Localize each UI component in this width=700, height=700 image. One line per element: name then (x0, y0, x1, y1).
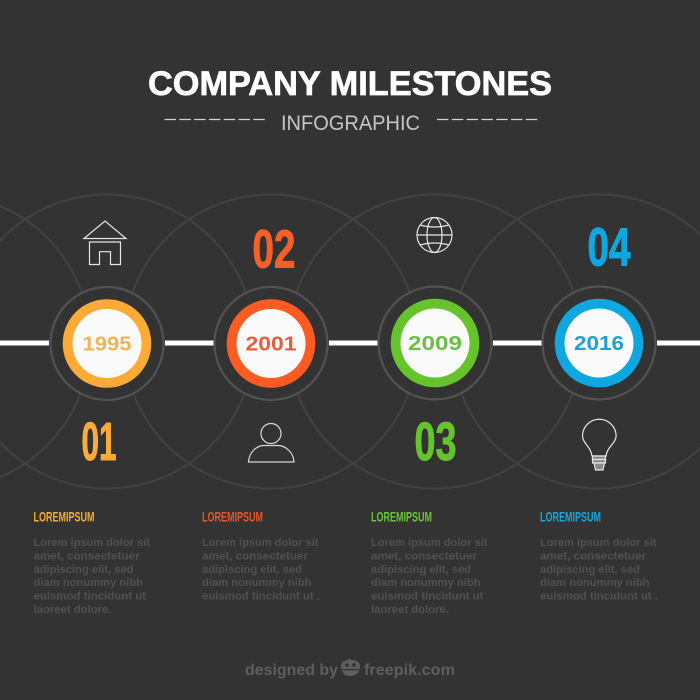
number 04: 04 (588, 217, 630, 277)
text block 1: LOREMIPSUM (34, 508, 94, 524)
text block 3: laoreet dolore. (371, 604, 449, 616)
text block 3: euismod tincidunt ut (371, 590, 484, 602)
text block 1: diam nonummy nibh (34, 577, 143, 589)
text block 2: adipiscing elit, sed (202, 564, 302, 576)
text block 3: Lorem ipsum dolor sit (371, 537, 488, 549)
icon: person (248, 424, 294, 462)
milestone 2009: 2009 (408, 333, 462, 355)
text block 2 (202, 508, 320, 602)
number 03: 03 (414, 412, 456, 472)
text block 4: Lorem ipsum dolor sit (540, 537, 657, 549)
number 02: 02 (252, 219, 296, 279)
text block 2: Lorem ipsum dolor sit (202, 537, 319, 549)
subtitle: INFOGRAPHIC (281, 112, 420, 135)
text block 4 (540, 508, 658, 602)
text block 1: Lorem ipsum dolor sit (34, 537, 150, 549)
text block 4: diam nonummy nibh (540, 577, 650, 589)
text block 2: amet, consectetuer (202, 550, 309, 562)
number 01: 01 (82, 412, 116, 472)
text block 3 (371, 508, 488, 616)
text block 3: adipiscing elit, sed (371, 564, 471, 576)
text block 1 (34, 508, 150, 616)
footer credit (245, 658, 455, 679)
milestone 2016 (542, 286, 656, 400)
milestone 1995: 1995 (82, 333, 132, 355)
icon: house (84, 221, 126, 264)
text block 2: euismod tincidunt ut . (202, 590, 320, 602)
text block 1: amet, consectetuer (34, 550, 140, 562)
milestone 2016: 2016 (574, 333, 624, 355)
text block 4: LOREMIPSUM (540, 508, 601, 524)
text block 4: adipiscing elit, sed (540, 564, 640, 576)
icon: light bulb (582, 419, 616, 470)
background overlapping circles (0, 194, 700, 488)
text block 2: LOREMIPSUM (202, 508, 263, 524)
text block 1: laoreet dolore. (34, 604, 112, 616)
text block 4: euismod tincidunt ut . (540, 590, 658, 602)
footer credit: designed by (245, 662, 338, 679)
icon: freepik logo (341, 658, 360, 676)
text block 2: diam nonummy nibh (202, 577, 312, 589)
milestone 1995 (50, 287, 164, 400)
milestone 2001 (214, 287, 328, 400)
title: COMPANY MILESTONES (148, 65, 552, 103)
milestone 2009 (378, 286, 492, 400)
timeline line (0, 340, 700, 346)
text block 1: adipiscing elit, sed (34, 564, 134, 576)
footer credit: freepik.com (364, 662, 455, 679)
text block 3: LOREMIPSUM (371, 508, 432, 524)
text block 3: amet, consectetuer (371, 550, 478, 562)
text block 3: diam nonummy nibh (371, 577, 481, 589)
text block 1: euismod tincidunt ut (34, 590, 146, 602)
milestone 2001: 2001 (246, 333, 296, 355)
icon: globe (417, 218, 452, 252)
text block 4: amet, consectetuer (540, 550, 647, 562)
